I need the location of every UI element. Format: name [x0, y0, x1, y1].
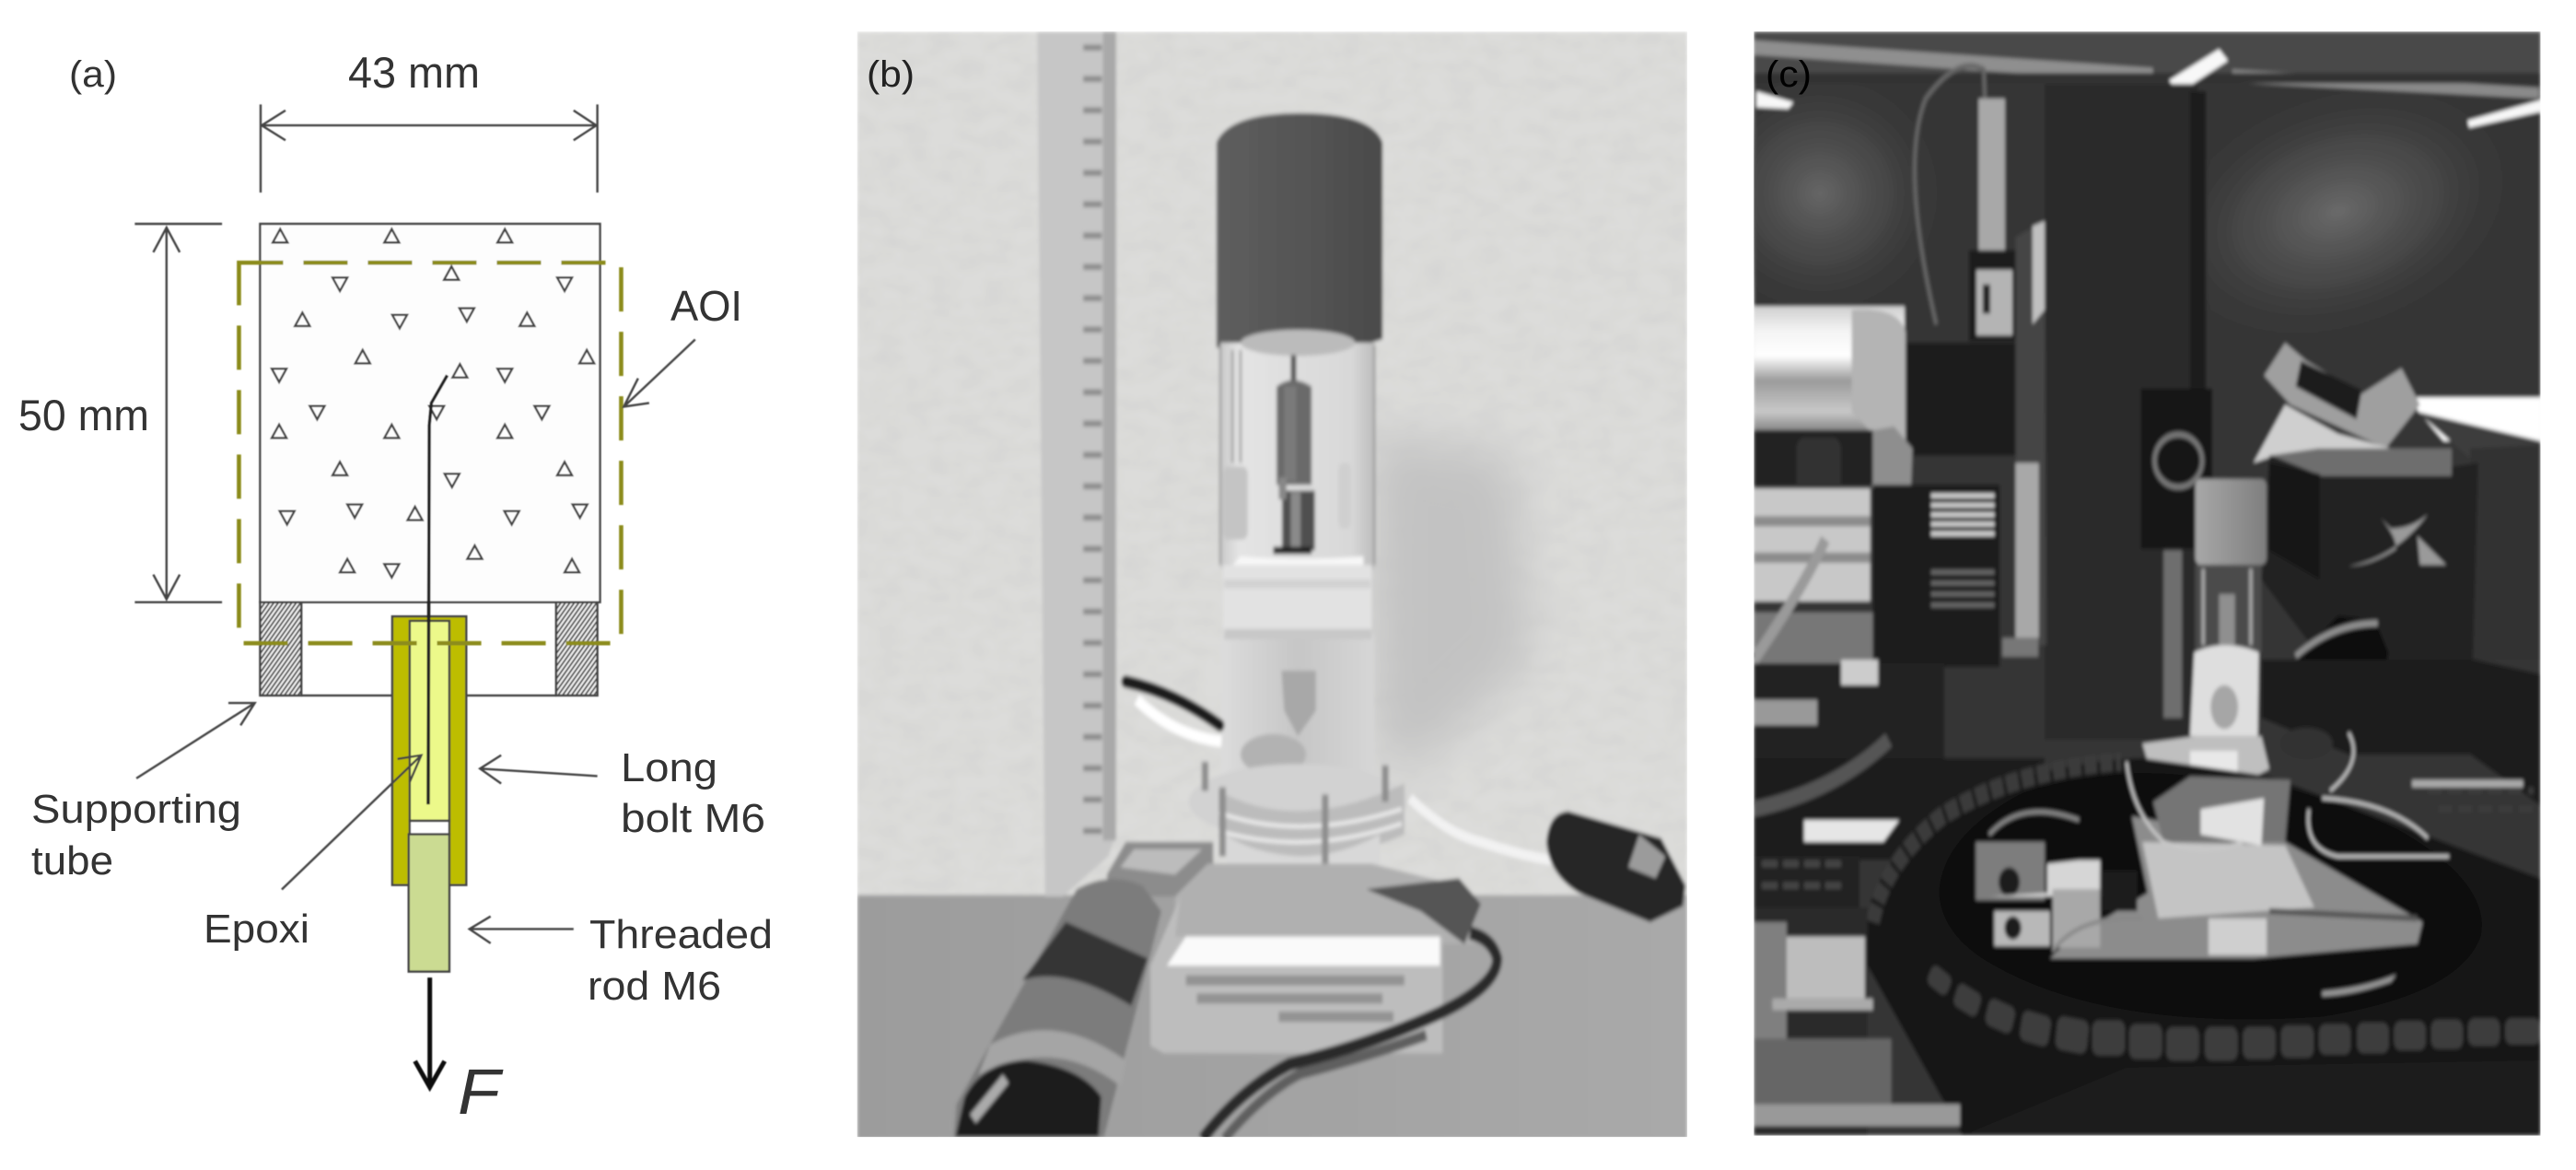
clear tube — [1220, 330, 1374, 568]
dimension 50 mm — [134, 224, 222, 603]
label Epoxi: Epoxi — [204, 907, 309, 952]
long bolt M6 — [392, 616, 466, 885]
arrow to epoxy — [282, 755, 421, 890]
black connector — [1546, 812, 1685, 922]
panel b: photo of the loading device — [857, 31, 1687, 1140]
threaded rod M6 — [409, 835, 449, 972]
arrow to AOI — [624, 340, 695, 406]
label AOI: AOI — [670, 282, 742, 330]
label Supporting tube: Supporting — [31, 787, 241, 832]
wall shadow — [1374, 434, 1530, 769]
arrow to threaded rod — [470, 917, 574, 943]
lower dark machine — [2261, 660, 2540, 805]
wall lighting — [1754, 99, 1905, 287]
arrow to supporting tube — [136, 703, 255, 778]
cable chain ring — [1865, 758, 2540, 1136]
detector box with logo — [2261, 449, 2478, 740]
dark central column — [2045, 84, 2198, 740]
load cell block — [1150, 896, 1442, 1053]
detector top housing — [2407, 397, 2540, 660]
label (c): (c) — [1766, 54, 1812, 95]
diagram shapes — [134, 104, 695, 1087]
panel c: photo of the device inside the CT scanner — [1693, 31, 2540, 1136]
label Supporting tube: tube — [31, 838, 113, 883]
x-ray source housing — [1754, 302, 2015, 490]
black cable — [1202, 933, 1498, 1140]
right rail grating — [2412, 780, 2540, 809]
label 43 mm: 43 mm — [348, 48, 480, 97]
side plate — [2002, 221, 2046, 657]
back wall — [1754, 31, 2540, 1136]
concrete cube with aggregate — [260, 224, 600, 603]
label (b): (b) — [867, 54, 915, 95]
label Threaded rod M6: Threaded — [589, 912, 773, 957]
wall — [857, 31, 1687, 899]
specimen cap — [1217, 113, 1382, 349]
clamped load cell and wires — [1989, 728, 2449, 951]
AOI dashed frame — [239, 263, 621, 643]
arrow to long bolt — [480, 755, 598, 783]
photo scene c — [1693, 31, 2540, 1136]
specimen in scanner — [2142, 479, 2269, 780]
finned body — [1873, 485, 1999, 667]
white cable right — [1410, 798, 1552, 860]
flange — [1191, 759, 1406, 866]
dimension 43 mm — [261, 104, 598, 193]
label Threaded rod M6: rod M6 — [588, 964, 721, 1009]
vertical actuator — [1915, 65, 2017, 341]
scanner stage — [1976, 816, 2422, 958]
metal mount — [1107, 842, 1481, 944]
supporting tube section — [260, 603, 598, 696]
table — [857, 895, 1687, 1140]
lower foreground floor — [1963, 1060, 2540, 1136]
rear mount — [2141, 389, 2212, 718]
black and white cable left — [1125, 682, 1219, 725]
label (a): (a) — [69, 54, 117, 95]
electric motor — [954, 879, 1161, 1137]
ruler — [1037, 31, 1116, 896]
label force F: F — [458, 1056, 505, 1128]
camera optics — [2254, 343, 2420, 463]
left lower rail block — [1754, 857, 1960, 1136]
frosted collar and lower tube — [1223, 564, 1372, 769]
label 50 mm: 50 mm — [18, 391, 149, 439]
ceiling lights — [1756, 49, 2540, 128]
label Long bolt M6: bolt M6 — [621, 796, 765, 841]
ceiling rails — [1754, 31, 2540, 99]
photo scene b — [857, 31, 1687, 1140]
label Long bolt M6: Long — [621, 745, 717, 790]
wall lighting right — [2208, 123, 2459, 300]
chain links bottom — [1926, 964, 2540, 1060]
panel a: schematic of the specimen — [18, 48, 773, 1128]
embedded wire — [428, 375, 448, 804]
force arrow — [415, 977, 445, 1087]
left lower cooling lines — [1754, 488, 2045, 860]
